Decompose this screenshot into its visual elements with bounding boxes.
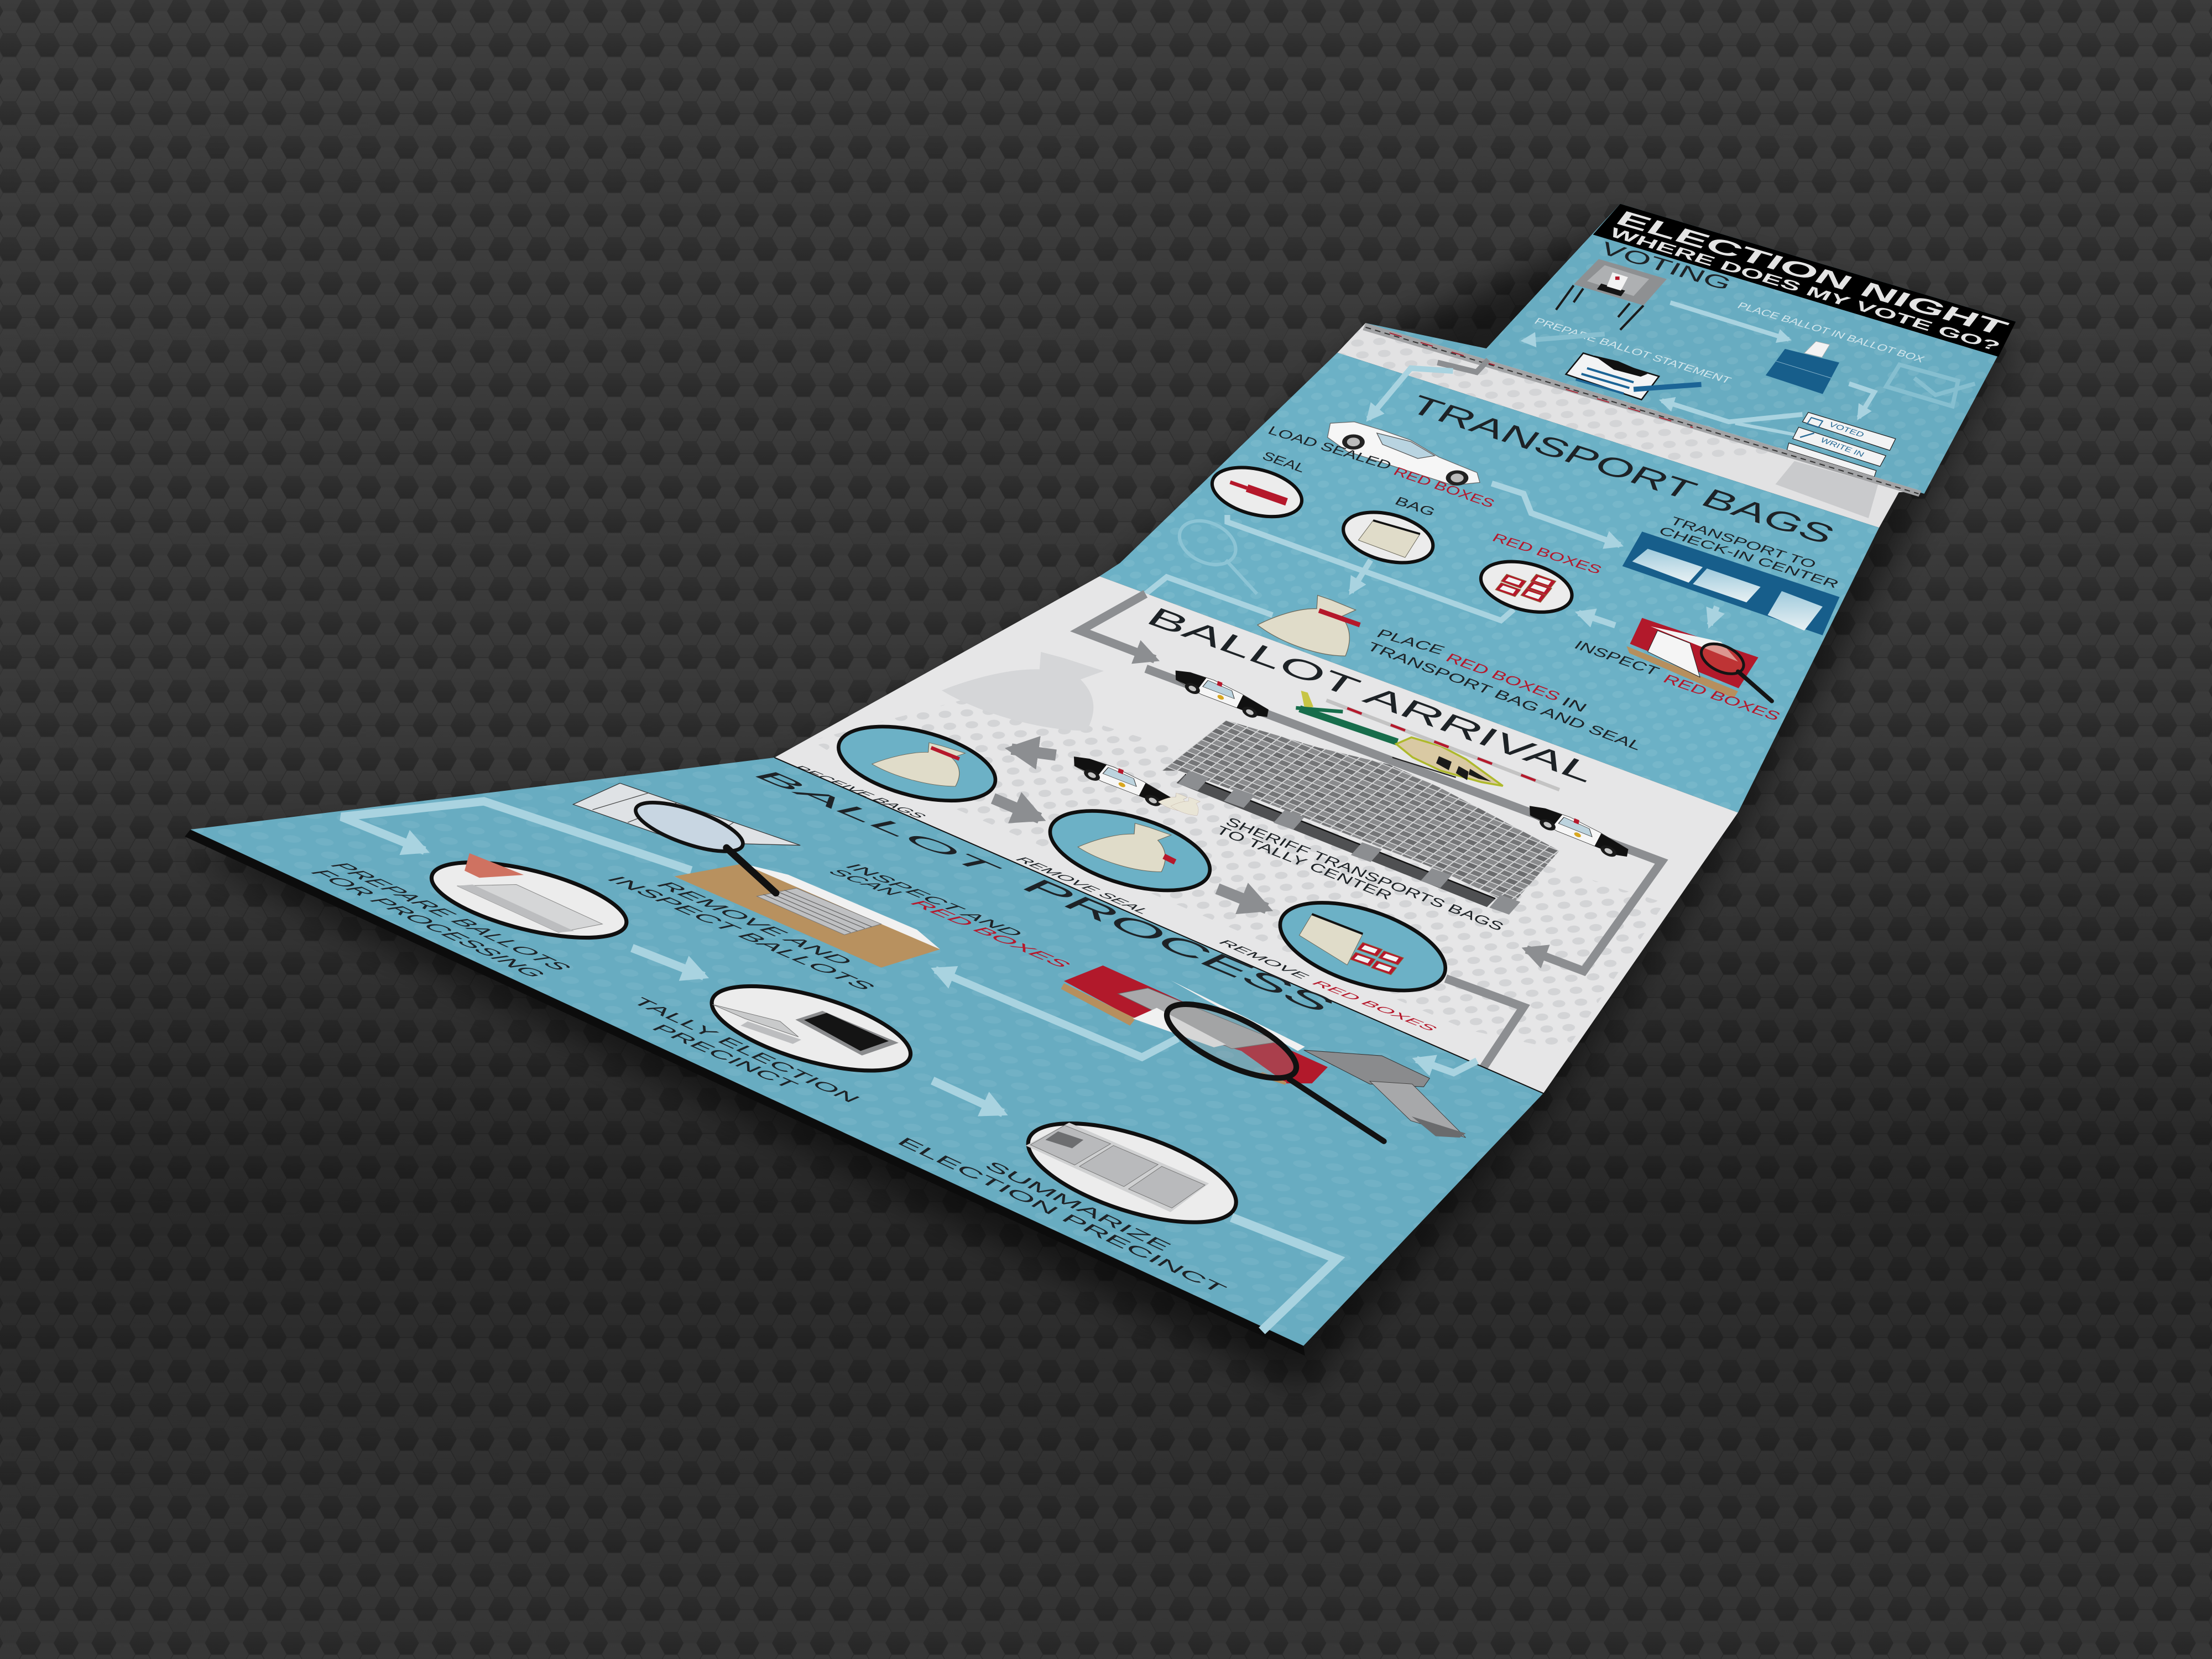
arrow: tally to summarize: [932, 1081, 1003, 1113]
text: tally election precinct: PRECINCT: [646, 1022, 803, 1091]
icon: ballots under magnifier: [573, 783, 800, 893]
icon: prepare ballots ellipse: [425, 847, 633, 953]
title banner: [1593, 204, 2016, 357]
panel: ballot process: [190, 758, 1543, 1346]
paper thickness edge: [185, 830, 1305, 1356]
text: tally election precinct: TALLY ELECTION: [627, 995, 865, 1105]
text: tally election precinct: [627, 995, 865, 1105]
label: transport to check-in center: TRANSPORT TO: [1667, 515, 1819, 571]
arrow: faint elbow into arrival: [1145, 577, 1272, 615]
text: remove and inspect ballots: REMOVE AND: [650, 880, 859, 966]
arrow: faint return: [1524, 334, 1605, 341]
panel: ballot arrival: [775, 576, 1738, 1093]
icon: tally ellipse: [703, 969, 919, 1088]
icon: voting booth: [1556, 259, 1667, 330]
arrow: scanner to tan box: [935, 970, 1178, 1057]
paper drop shadow: [190, 226, 2016, 1390]
card: write in: [1793, 427, 1886, 466]
label: place red boxes in transport bag and seal: [1364, 627, 1646, 753]
arrow: booth to box: [1670, 302, 1789, 340]
card: voted: [1802, 413, 1896, 451]
label: load sealed red boxes: [1265, 424, 1497, 510]
card: voted: VOTED: [1827, 421, 1866, 439]
icon: small bags near car: [1158, 793, 1200, 815]
arrow: bag to sealed bag: [1351, 560, 1371, 592]
arrow: gray elbow from voting: [1437, 360, 1488, 372]
heading: ballot process: BALLOT: [744, 769, 1010, 875]
label: remove red boxes: [1214, 938, 1442, 1032]
icon: remove seal circle: [1041, 795, 1219, 906]
fold strip: [1363, 323, 1921, 497]
icon: faint magnifier: [1172, 512, 1257, 594]
icon: inspect red box: [1626, 618, 1772, 701]
label: receive bags: RECEIVE BAGS: [788, 765, 931, 819]
heading: transport bags: TRANSPORT BAGS: [1402, 390, 1841, 550]
panel: voting: [1365, 204, 2016, 494]
text: sheriff transports bags: SHERIFF TRANSPORTS BAGS: [1223, 815, 1507, 933]
heading: ballot process: PROCESS: [1012, 874, 1347, 1016]
label: transport to check-in center: CHECK-IN CENTER: [1656, 524, 1841, 591]
text: sheriff transports bags: [1213, 815, 1507, 933]
icon: seal circle: [1207, 459, 1307, 525]
icon: red boxes circle: [1475, 553, 1577, 620]
icon: barcode scanner: [1304, 1050, 1466, 1138]
label: remove seal: REMOVE SEAL: [1011, 856, 1155, 915]
icon: helicopter: [1296, 691, 1559, 790]
text: inspect and scan red boxes: SCAN: [822, 868, 907, 897]
icon: tally center building: [1161, 720, 1559, 915]
icon: check-in center building: [1623, 531, 1840, 635]
text: inspect and scan red boxes: RED BOXES: [905, 899, 1077, 969]
icon: receive bags circle: [831, 713, 1003, 815]
heading: ballot arrival: BALLOT ARRIVAL: [1140, 602, 1603, 788]
icon: police car 3: [1527, 801, 1630, 863]
label: place red boxes in transport bag and seal: RED BOXES: [1443, 650, 1564, 703]
road line with return arrow: [1146, 669, 1662, 971]
heading: ballot process: [744, 769, 1347, 1016]
arrow: remove seal to remove boxes: [1218, 889, 1267, 909]
arrow: prepare to tally: [632, 948, 704, 976]
text: prepare ballots for processing: PREPARE BALLOTS: [324, 862, 578, 971]
label: bag: BAG: [1392, 494, 1438, 519]
text: summarize election precinct: ELECTION PRECINCT: [893, 1135, 1230, 1296]
arrow: write-in to clipboard: [1735, 423, 1794, 435]
card: write in: WRITE IN: [1819, 437, 1866, 459]
text: prepare ballots for processing: FOR PROCESSING: [304, 869, 553, 978]
text: place ballot in ballot box: PLACE BALLOT IN BALLOT BOX: [1735, 300, 1927, 364]
card: third option: [1787, 443, 1876, 477]
title: ELECTION NIGHT: [1611, 206, 2013, 340]
icon: police car 2: [1071, 752, 1174, 812]
icon: tan box with ballots: [674, 848, 940, 968]
label: place red boxes in transport bag and seal: IN: [1558, 695, 1590, 715]
label: load sealed red boxes: LOAD SEALED: [1265, 424, 1395, 472]
arrow: car to receive bags: [1011, 749, 1056, 755]
arrow: box to cards: [1849, 384, 1874, 418]
arrow: from summarize to bottom edge: [1232, 1218, 1337, 1331]
panel: transport bags: [1099, 323, 1921, 812]
label: seal: SEAL: [1260, 448, 1308, 475]
heading: voting: VOTING: [1596, 238, 1735, 294]
label: load sealed red boxes: RED BOXES: [1391, 465, 1497, 510]
icon: ballot box: [1766, 341, 1839, 394]
label: remove red boxes: RED BOXES: [1307, 979, 1442, 1032]
arrow: gray elbow down to process: [1446, 978, 1524, 1075]
arrow: cards to clipboard: [1662, 400, 1802, 422]
icon: police car 1: [1172, 665, 1270, 723]
icon: remove red boxes circle: [1270, 885, 1456, 1008]
arrow: top return: [341, 801, 691, 870]
label: remove red boxes: REMOVE: [1214, 938, 1313, 980]
boundary line: [775, 758, 1543, 1093]
icon: faint checkbox: [1886, 364, 1975, 406]
icon: bag circle: [1338, 504, 1438, 571]
label: inspect red boxes: RED BOXES: [1660, 672, 1784, 723]
label: place red boxes in transport bag and seal: PLACE: [1373, 627, 1448, 658]
text: prepare ballot statement: PREPARE BALLOT STATEMENT: [1532, 316, 1734, 385]
arrow: red box to circle: [1579, 613, 1615, 625]
arrow: chevron at fold: [1416, 1060, 1477, 1073]
icon: white car: [1328, 422, 1480, 486]
arrow: receive to remove seal: [993, 799, 1040, 818]
icon: clipboard: [1566, 353, 1702, 400]
arrow: car to check-in center: [1491, 483, 1620, 545]
arrow: center to red box: [1710, 607, 1717, 625]
icon: red box with magnifier: [1061, 966, 1384, 1141]
text: inspect and scan red boxes: INSPECT AND: [839, 863, 1029, 938]
text: inspect and scan red boxes: [822, 863, 1077, 969]
arrow: seal to bag: [1227, 515, 1514, 620]
arrow: gray elbow: [1080, 594, 1155, 659]
text: sheriff transports bags: TO TALLY CENTER: [1213, 823, 1395, 902]
icon: sealed bag: [1258, 596, 1360, 656]
label: place red boxes in transport bag and seal: TRANSPORT BAG AND SEAL: [1364, 639, 1646, 753]
icon: ghost bag: [942, 652, 1104, 731]
arrow: from voting into car: [1368, 368, 1453, 419]
icon: light-gray sheet: [1775, 461, 1878, 518]
text: remove and inspect ballots: INSPECT BALLOTS: [601, 875, 883, 992]
label: inspect red boxes: [1571, 638, 1784, 723]
subtitle: WHERE DOES MY VOTE GO?: [1606, 225, 2004, 354]
text: summarize election precinct: SUMMARIZE: [980, 1159, 1176, 1253]
icon: summarize ellipse: [1017, 1103, 1247, 1243]
label: red boxes: RED BOXES: [1489, 530, 1605, 577]
label: inspect red boxes: INSPECT: [1571, 638, 1662, 679]
